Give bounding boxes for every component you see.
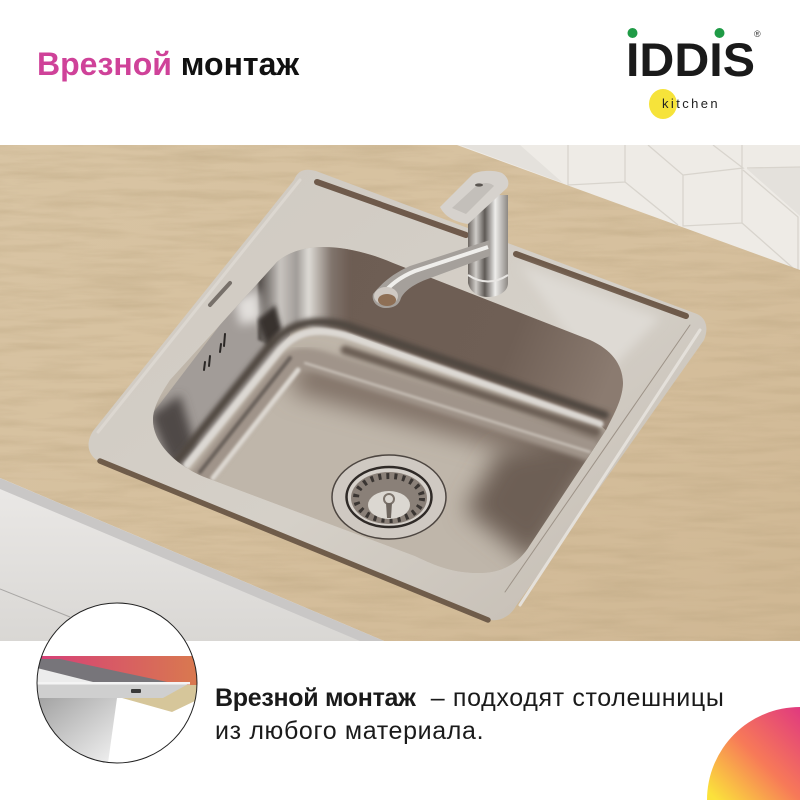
logo: IDDIS kitchen: ® [754,29,761,39]
left wall with reflections [153,261,290,468]
white bottom band [0,641,800,800]
white top band [0,0,800,145]
corner gradient shape [707,707,800,800]
sink [89,170,706,620]
countertop top surface [37,656,197,685]
description text [215,684,724,745]
drain [332,455,446,539]
faucet [373,171,508,308]
floor shading [295,375,590,455]
countertop: wood [0,145,800,641]
sink rim reflection [37,659,172,683]
faucet handle [440,171,508,224]
sink flange [38,684,188,698]
title: Врезной монтаж [37,46,299,82]
detail circle: countertop cross-section [37,603,197,763]
basin [140,240,640,580]
photo: kitchen countertop with sink [0,145,800,641]
faucet column [468,195,508,297]
back wall [344,248,623,430]
rim shadow edges and highlights [98,180,700,620]
tile backsplash [440,145,800,275]
chipboard edge [122,685,197,712]
ridge between walls and floor [176,322,605,478]
description text: из любого материала. [215,717,484,745]
logo: IDDIS kitchen [626,28,761,119]
cabinet front below the countertop [0,478,384,641]
basin floor [200,362,600,580]
description text: Врезной монтаж – подходят столешницы [215,684,724,712]
overflow slots [204,334,225,370]
logo: IDDIS kitchen: IDDIS [626,33,755,86]
deck highlight around faucet [520,265,660,380]
faucet spout [373,240,490,308]
sink wall [37,698,117,763]
logo: IDDIS kitchen: kitchen [662,96,720,111]
sink rim [89,170,706,620]
